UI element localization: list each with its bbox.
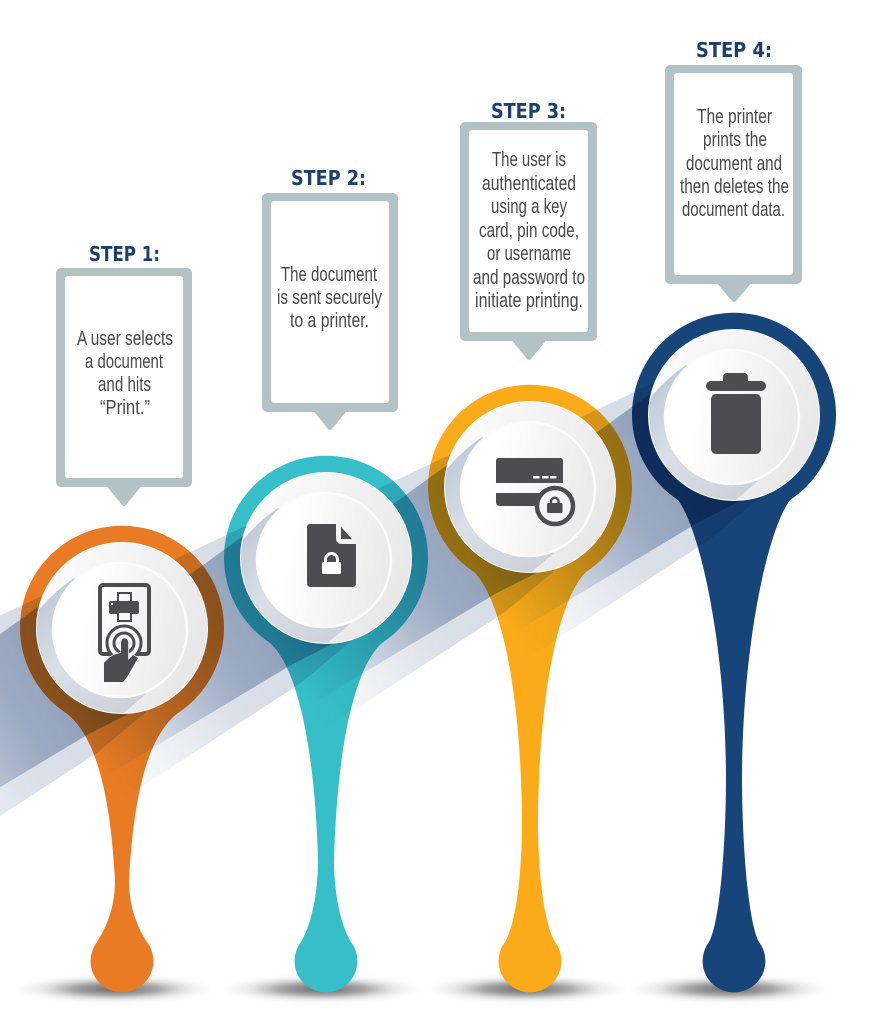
pin: step 4 navy	[632, 313, 836, 992]
long shadow: step 2	[0, 514, 366, 940]
text: step 2 description: to a printer.	[290, 309, 369, 332]
text: step 1 description: a document	[85, 350, 163, 373]
text: step 1 description: A user selects	[77, 327, 173, 350]
long shadow: step 3	[110, 443, 570, 869]
text: step 4 description: then deletes the	[680, 175, 789, 198]
text: step 2 description: is sent securely	[277, 286, 383, 309]
text: step 4 description	[680, 105, 789, 221]
disc: step 1	[32, 542, 208, 718]
icon: trash can	[706, 373, 766, 454]
heading: step 3: STEP 3:	[491, 99, 566, 123]
text: step 1 description: and hits	[98, 373, 151, 396]
disc: step 2	[236, 472, 412, 648]
pin: step 1 orange	[20, 526, 224, 992]
callout: step 2	[262, 166, 398, 430]
icon: printer tablet with touching hand	[100, 585, 149, 682]
text: step 4 description: prints the	[703, 128, 767, 151]
long shadow: step 1	[0, 584, 162, 1010]
text: step 3 description: initiate printing.	[475, 289, 583, 312]
pin: step 2 teal	[224, 456, 428, 992]
floor shadows	[15, 975, 830, 1003]
callout: step 3	[460, 99, 597, 360]
text: step 3 description: card, pin code,	[479, 219, 579, 242]
icon: locked document	[307, 524, 356, 587]
disc: step 3	[440, 401, 616, 577]
pin: step 3 yellow	[428, 385, 632, 992]
text: step 3 description: or username	[487, 242, 571, 265]
text: step 2 description	[277, 263, 383, 332]
text: step 4 description: The printer	[697, 105, 772, 128]
text: step 3 description	[473, 148, 585, 312]
text: step 4 description: document data.	[682, 198, 785, 221]
text: step 1 description	[77, 327, 173, 419]
icon: key card with lock	[496, 458, 573, 524]
callout: step 4	[665, 38, 802, 302]
text: step 3 description: authenticated	[482, 172, 576, 195]
text: step 3 description: The user is	[492, 148, 566, 171]
heading: step 1: STEP 1:	[89, 242, 160, 266]
disc: step 4	[644, 329, 820, 505]
long shadow: step 4	[314, 371, 774, 797]
text: step 3 description: and password to	[473, 266, 585, 289]
heading: step 4: STEP 4:	[696, 38, 772, 62]
callout: step 1	[56, 242, 192, 506]
text: step 1 description: “Print.”	[100, 396, 150, 419]
heading: step 2: STEP 2:	[291, 166, 366, 190]
text: step 4 description: document and	[686, 152, 782, 175]
text: step 3 description: using a key	[491, 195, 568, 218]
text: step 2 description: The document	[281, 263, 377, 286]
